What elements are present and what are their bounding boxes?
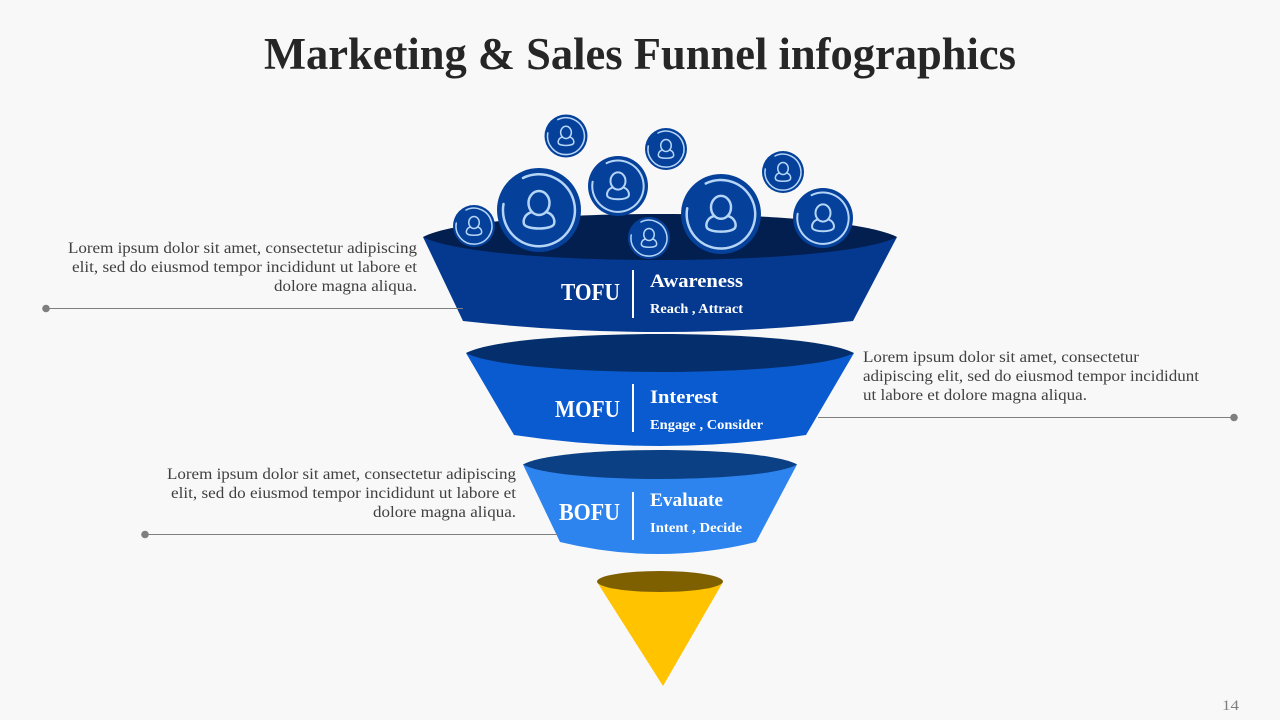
icon: person 5	[497, 168, 581, 252]
BOFU description text: Lorem ipsum dolor sit amet, consectetur adipiscing	[167, 466, 516, 483]
funnel stage: MOFU	[466, 334, 854, 446]
TOFU description text: Lorem ipsum dolor sit amet, consectetur adipiscing	[68, 240, 417, 257]
BOFU subheading: Intent , Decide	[650, 521, 742, 536]
cone body	[597, 582, 723, 686]
TOFU description text: dolore magna aliqua.	[274, 278, 417, 295]
MOFU description text: adipiscing elit, sed do eiusmod tempor incididunt	[863, 368, 1200, 385]
funnel tip: yellow cone	[597, 571, 723, 686]
page number: 14	[1222, 698, 1240, 714]
BOFU description text	[167, 466, 517, 521]
TOFU label: TOFU	[561, 280, 620, 306]
MOFU funnel opening	[466, 334, 854, 372]
icon: person 1	[544, 114, 588, 158]
TOFU separator	[632, 270, 634, 318]
MOFU label: MOFU	[555, 397, 620, 423]
TOFU subheading: Reach , Attract	[650, 302, 743, 317]
callout: MOFU description	[818, 349, 1238, 421]
MOFU subheading: Engage , Consider	[650, 418, 763, 433]
MOFU description text: ut labore et dolore magna aliqua.	[863, 387, 1087, 404]
MOFU separator	[632, 384, 634, 432]
icon: person 7	[628, 217, 670, 259]
MOFU description text: Lorem ipsum dolor sit amet, consectetur	[863, 349, 1140, 366]
funnel stage: BOFU	[523, 450, 797, 554]
funnel stage: TOFU	[423, 214, 897, 332]
MOFU heading: Interest	[650, 387, 719, 408]
MOFU description text	[863, 349, 1200, 404]
BOFU leader line	[141, 531, 558, 538]
TOFU funnel body	[423, 237, 897, 332]
TOFU description text	[68, 240, 418, 295]
callout: BOFU description	[141, 466, 558, 538]
BOFU label: BOFU	[559, 500, 620, 526]
title: Marketing & Sales Funnel infographics	[264, 29, 1016, 79]
BOFU description text: elit, sed do eiusmod tempor incididunt ut labore et	[171, 485, 517, 502]
cone opening	[597, 571, 723, 592]
TOFU heading: Awareness	[650, 271, 743, 292]
TOFU description text: elit, sed do eiusmod tempor incididunt ut labore et	[72, 259, 418, 276]
BOFU separator	[632, 492, 634, 540]
TOFU leader line	[42, 305, 463, 312]
BOFU funnel body	[523, 464, 797, 554]
MOFU funnel body	[466, 353, 854, 446]
MOFU leader line	[818, 414, 1238, 421]
icon: person 2	[645, 128, 687, 170]
callout: TOFU description	[42, 240, 463, 312]
icon: person 8	[681, 174, 761, 254]
TOFU funnel opening	[423, 214, 897, 260]
icon: person 4	[588, 156, 648, 216]
icon: person 9	[793, 188, 853, 248]
BOFU heading: Evaluate	[650, 490, 723, 511]
BOFU funnel opening	[523, 450, 797, 479]
BOFU description text: dolore magna aliqua.	[373, 504, 516, 521]
icon: person 6	[453, 205, 495, 247]
icon: person 3	[762, 151, 804, 193]
people icons above funnel	[453, 114, 853, 259]
